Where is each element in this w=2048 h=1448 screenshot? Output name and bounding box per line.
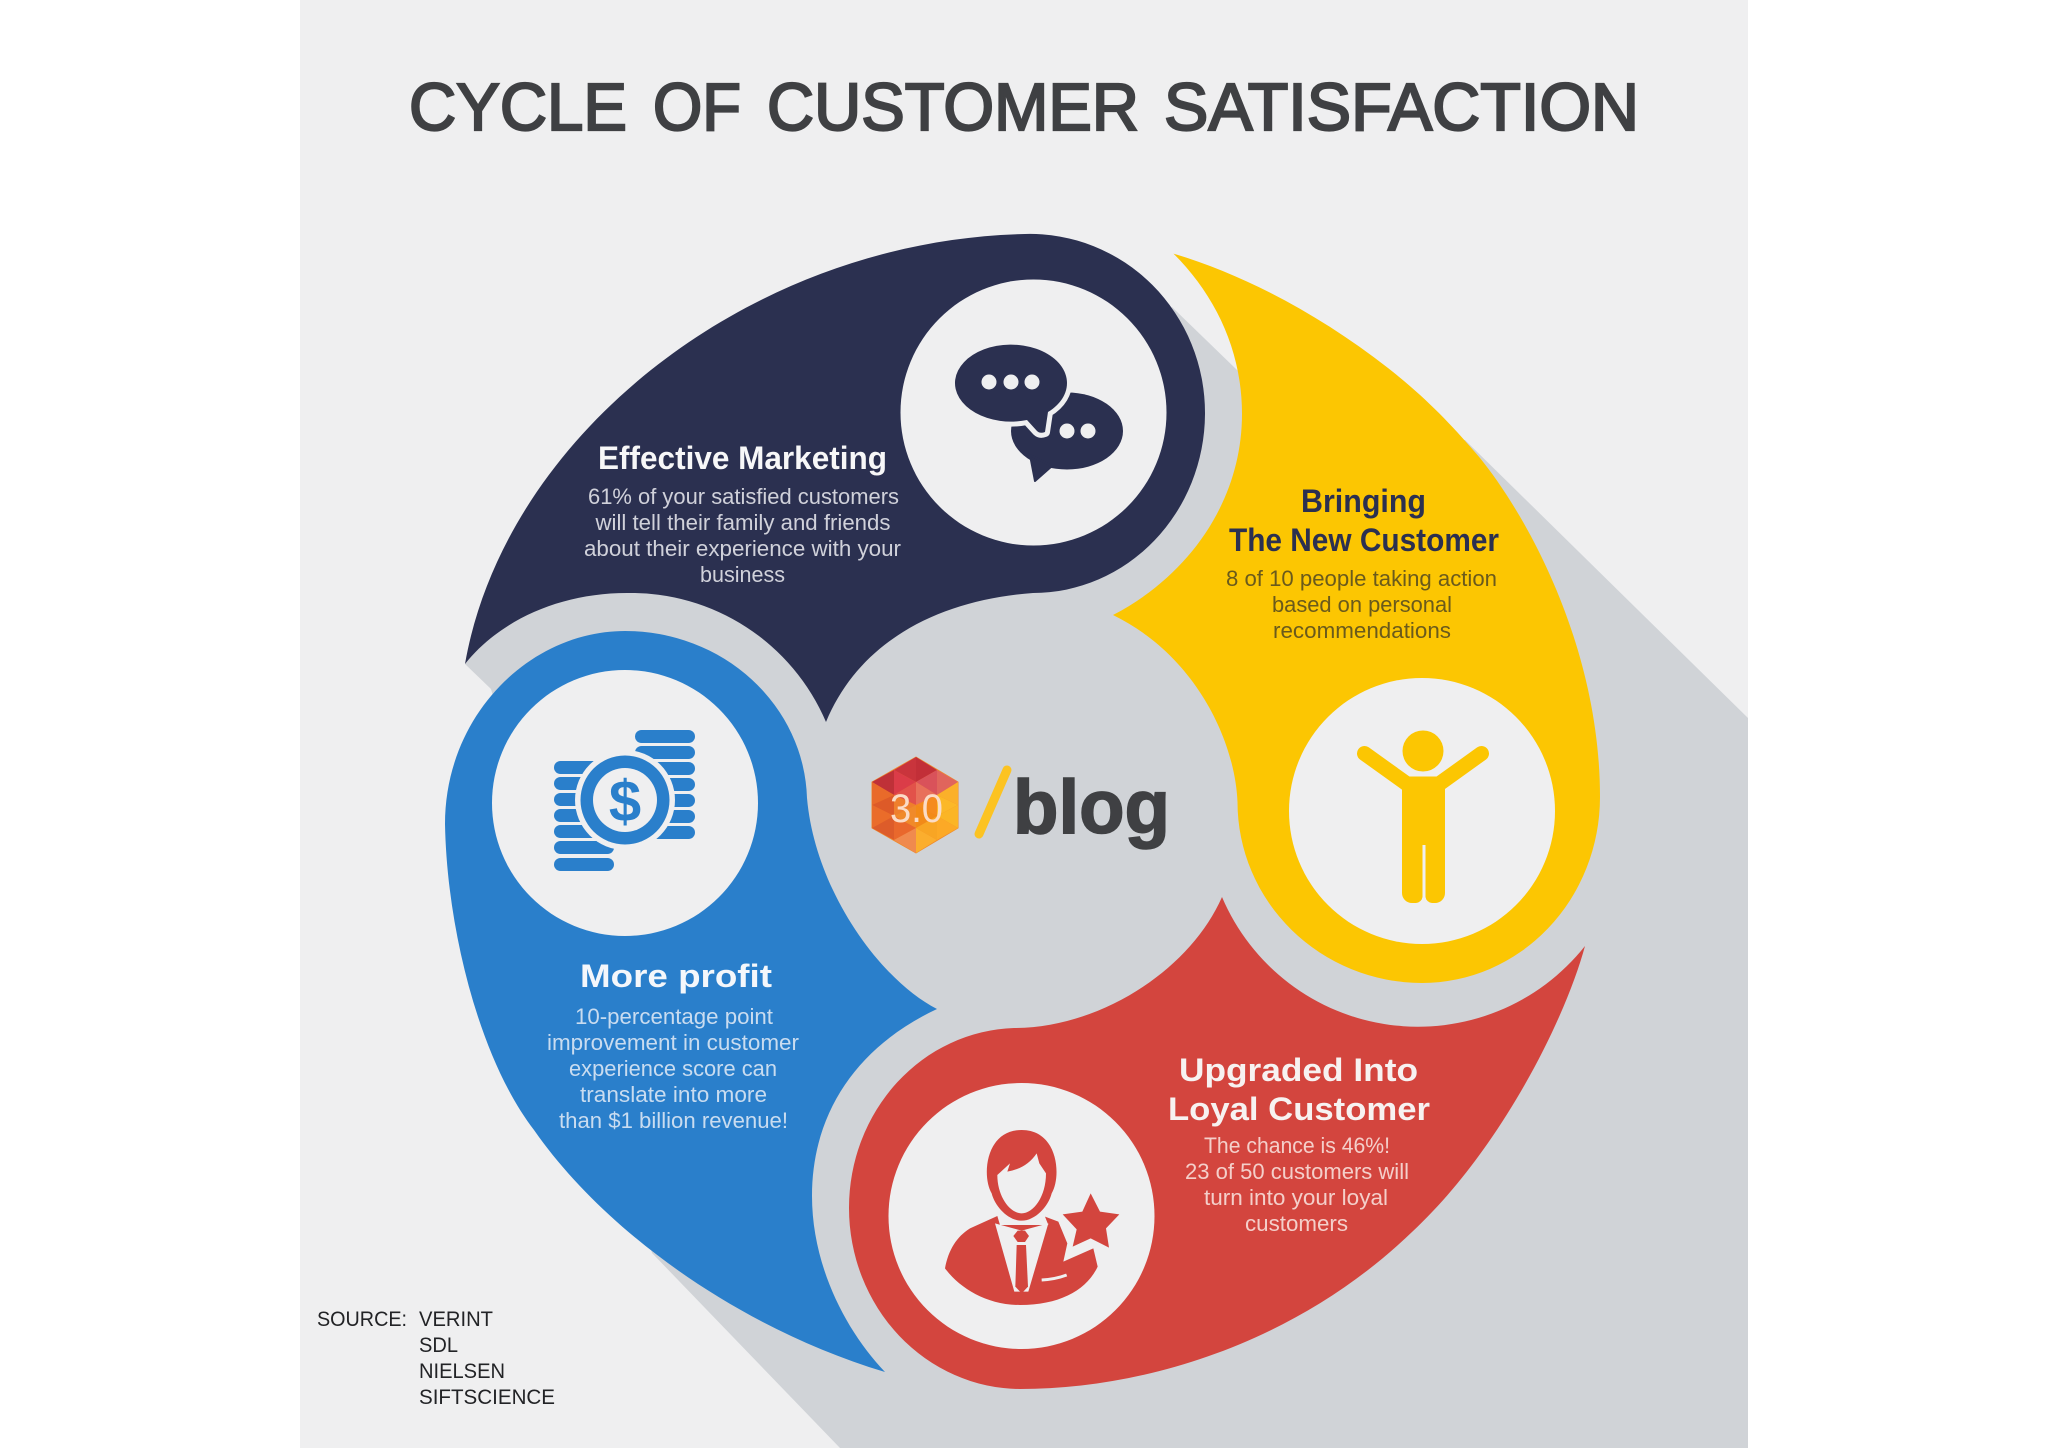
body text: [547, 1004, 799, 1133]
panel: more profit: [445, 631, 937, 1372]
icon circle: [492, 670, 758, 936]
icon: coin stacks with dollar: [554, 730, 695, 871]
body text: recommendations: [1273, 618, 1451, 643]
long shadow behind the cycle: [465, 307, 1748, 1448]
icon circle: [900, 280, 1166, 546]
source list: SIFTSCIENCE: [419, 1386, 555, 1409]
red petal: [849, 897, 1585, 1389]
source list: SOURCE:: [317, 1308, 407, 1331]
icon: faceted hexagon: 3.0: [890, 787, 943, 831]
title: SATISFACTION: [1164, 70, 1639, 145]
icon: coin stacks with dollar: $: [609, 769, 641, 834]
logo: 3.0 blog: [872, 757, 1170, 853]
yellow petal: [1113, 254, 1600, 983]
source list: NIELSEN: [419, 1360, 505, 1383]
body text: 61% of your satisfied customers: [588, 484, 899, 509]
wordmark: blog: [1013, 765, 1170, 850]
heading: The New Customer: [1229, 522, 1499, 558]
icon: person with raised arms: [1364, 730, 1482, 903]
icon: chat bubbles: [955, 345, 1123, 481]
body text: business: [700, 562, 785, 587]
navy petal: [465, 234, 1205, 722]
body text: [584, 484, 901, 587]
body text: The chance is 46%!: [1204, 1133, 1390, 1158]
heading: Upgraded Into: [1179, 1052, 1418, 1088]
body text: will tell their family and friends: [595, 510, 890, 535]
title: CUSTOMER: [767, 70, 1139, 145]
body text: customers: [1245, 1211, 1348, 1236]
body text: translate into more: [580, 1082, 767, 1107]
heading: [1229, 483, 1499, 558]
heading: Bringing: [1301, 483, 1426, 519]
source list: SDL: [419, 1334, 458, 1357]
blue petal: [445, 631, 937, 1372]
body text: [1185, 1133, 1409, 1236]
title: CYCLE: [409, 70, 627, 145]
panel: background: [300, 0, 1748, 1448]
body text: based on personal: [1272, 592, 1452, 617]
body text: 23 of 50 customers will: [1185, 1159, 1409, 1184]
title: OF: [653, 70, 741, 145]
body text: improvement in customer: [547, 1030, 799, 1055]
heading: Effective Marketing: [598, 440, 887, 476]
slash: [979, 770, 1007, 834]
body text: turn into your loyal: [1204, 1185, 1388, 1210]
panel: upgraded into loyal customer: [849, 897, 1585, 1389]
panel: bringing the new customer: [1113, 254, 1600, 983]
body text: experience score can: [569, 1056, 777, 1081]
body text: 8 of 10 people taking action: [1226, 566, 1497, 591]
title: [409, 70, 1639, 145]
body text: about their experience with your: [584, 536, 901, 561]
heading: Loyal Customer: [1168, 1091, 1430, 1127]
icon: businessman with star: [945, 1130, 1119, 1305]
body text: than $1 billion revenue!: [559, 1108, 788, 1133]
icon circle: [888, 1083, 1154, 1349]
body text: [1226, 566, 1497, 643]
icon: faceted hexagon: [872, 757, 958, 853]
panel: effective marketing: [465, 234, 1205, 722]
source list: [317, 1308, 555, 1409]
body text: 10-percentage point: [575, 1004, 774, 1029]
source list: VERINT: [419, 1308, 493, 1331]
heading: [1168, 1052, 1430, 1127]
heading: More profit: [580, 958, 772, 994]
icon circle: [1289, 678, 1555, 944]
